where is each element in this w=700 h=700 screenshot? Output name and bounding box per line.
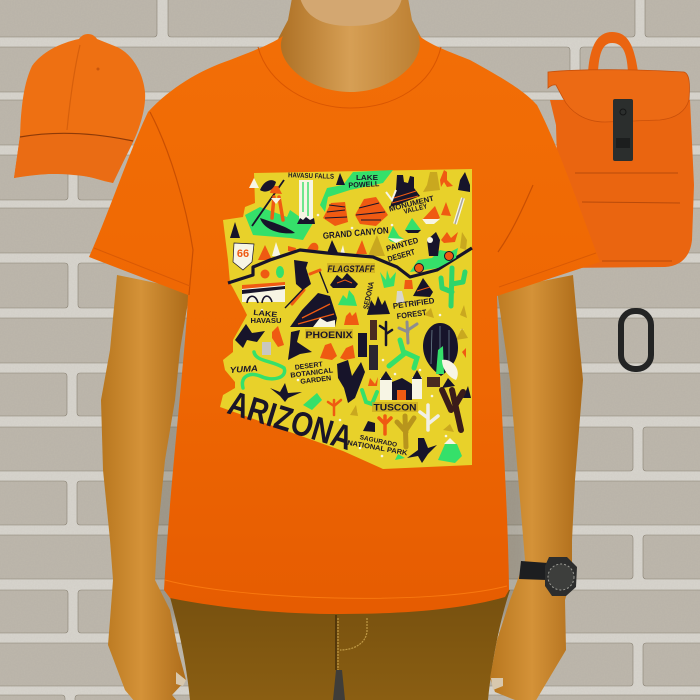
map labels: PAINTED (385, 236, 420, 253)
trees (230, 173, 385, 260)
phoenix prickly pear (288, 330, 312, 360)
small black and orange cacti, west (235, 324, 284, 355)
petrified forest logs and rock (396, 278, 433, 303)
map labels: PETRIFIED (392, 296, 435, 311)
map labels: SEDONA (361, 280, 376, 310)
hiker on mountain (285, 260, 337, 327)
map outline (220, 169, 472, 469)
waterfall (297, 180, 315, 224)
scattered map decorations (261, 214, 468, 460)
southwest plants (270, 377, 378, 415)
top right desert icons (386, 170, 470, 250)
lake havasu bridge (242, 266, 285, 303)
map labels (224, 172, 435, 458)
backpack (548, 32, 694, 268)
map labels: MONUMENT (388, 194, 435, 214)
hot air balloon (423, 323, 471, 398)
monument valley butte (390, 175, 420, 207)
route 66 shield (233, 243, 254, 270)
map labels: HAVASU FALLS (288, 172, 334, 181)
vintage car and driver (410, 232, 458, 272)
trousers (168, 590, 510, 700)
map labels: YUMA (229, 363, 258, 375)
phoenix label: PHOENIX (306, 330, 352, 340)
baseball cap (14, 34, 145, 183)
route 66 road (228, 248, 472, 283)
paddleboarder (252, 180, 295, 233)
map labels: FOREST (396, 308, 427, 321)
Arizona map print (220, 169, 472, 469)
map labels: DESERT (294, 361, 324, 372)
map labels: VALLEY (403, 203, 428, 216)
wristwatch (519, 557, 577, 596)
tuscon label: TUSCON (374, 402, 416, 412)
route 66 shield: 66 (237, 248, 249, 260)
map labels: POWELL (348, 179, 380, 190)
green lakes (245, 170, 393, 240)
map labels: BOTANICAL (290, 367, 334, 380)
orange rocks and bars (320, 320, 417, 370)
map labels: SAGURADO (359, 434, 398, 449)
man's neck and chin (270, 0, 430, 105)
yuma snake (242, 352, 285, 388)
sedona rocks and plants (338, 270, 396, 325)
grand canyon rocks (323, 197, 388, 226)
map labels: LAKE (253, 308, 278, 319)
map labels: HAVASU (250, 316, 282, 325)
left arm and hand (101, 275, 190, 700)
map labels: GRAND CANYON (322, 225, 389, 241)
map labels: NATIONAL PARK (347, 440, 408, 457)
map labels: GARDEN (300, 375, 332, 386)
tucson mission (380, 370, 422, 400)
right arm, hand (490, 275, 583, 700)
black carabiner ring (621, 311, 651, 369)
southern cacti (363, 390, 463, 463)
map labels: ARIZONA (224, 384, 357, 458)
saguaro cactus green (441, 268, 465, 306)
flagstaff black rocks (330, 273, 358, 288)
map labels: DESERT (387, 247, 416, 264)
green plant, tucson (362, 390, 377, 404)
orange t-shirt (89, 35, 600, 614)
flagstaff label: FLAGSTAFF (328, 264, 375, 274)
map labels: LAKE (356, 173, 378, 182)
black prickly pear cactus (337, 360, 365, 403)
